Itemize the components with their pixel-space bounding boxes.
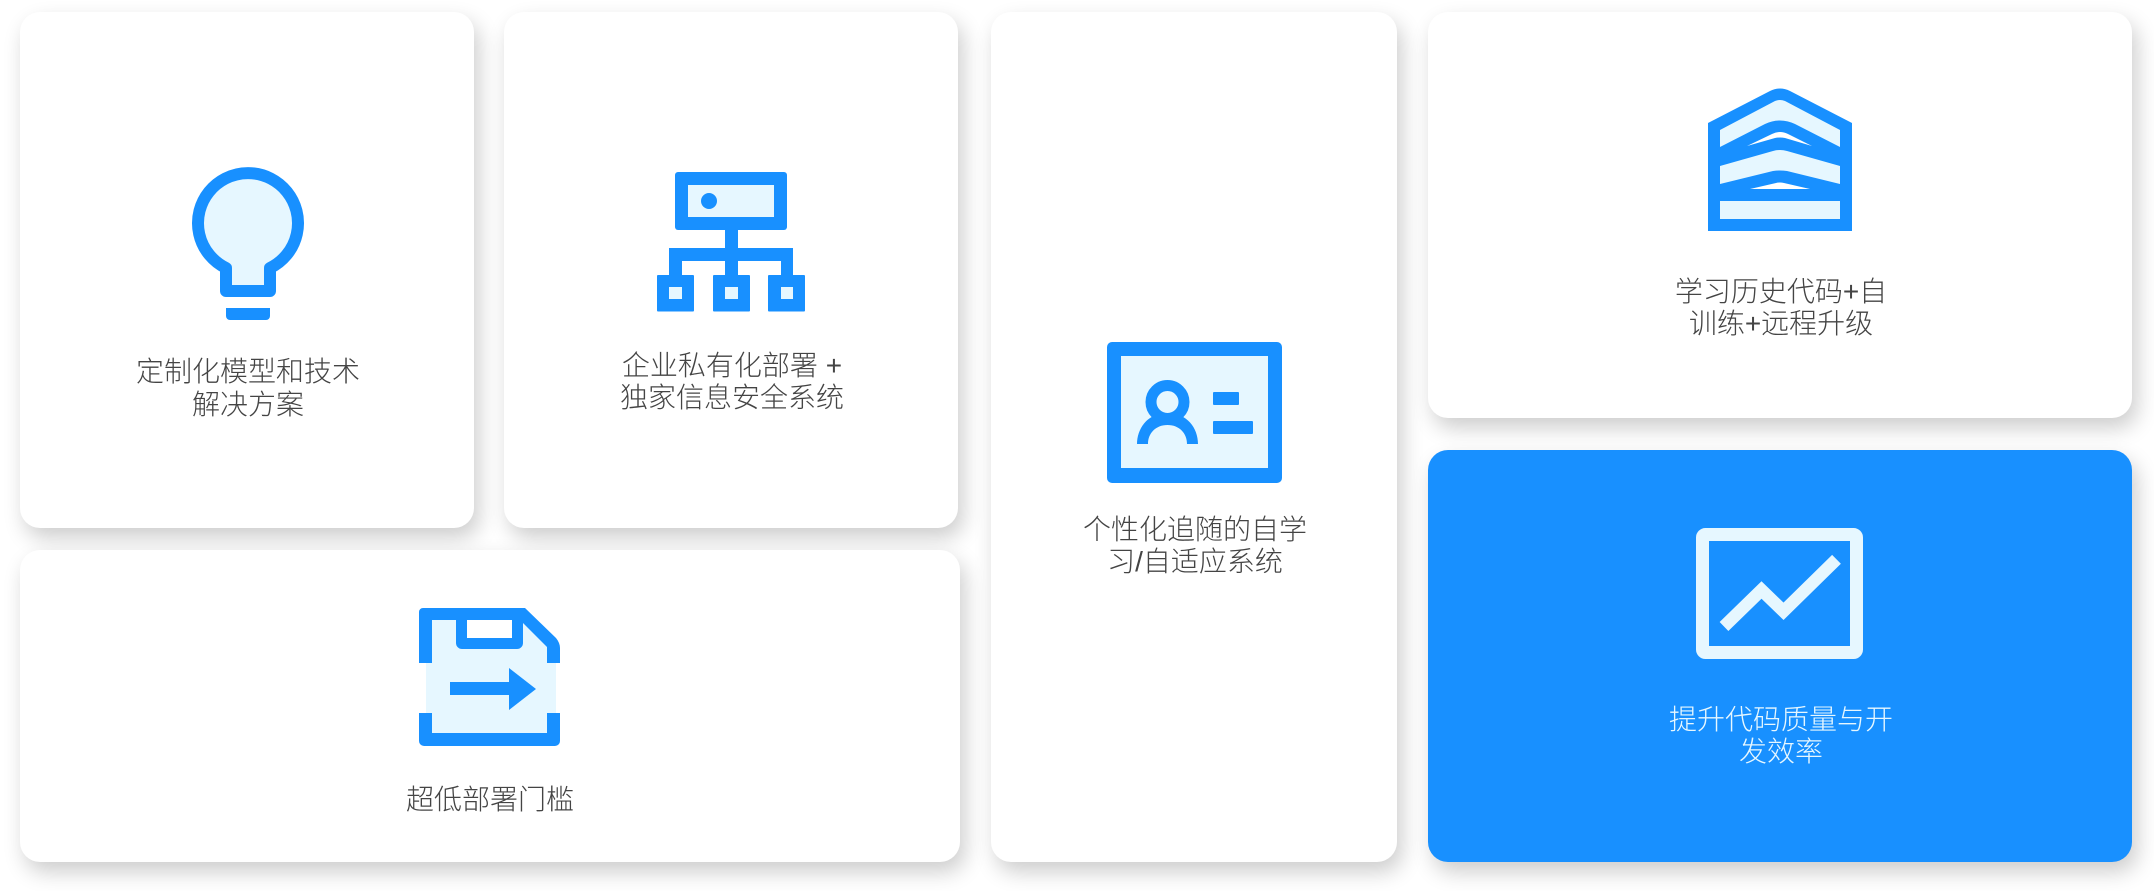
icon: floppy disk with arrow [419, 608, 560, 746]
panel: low deployment threshold [20, 550, 960, 862]
text: custom models label [136, 356, 360, 420]
text: learn from code history label: 学习历史代码+自 [1675, 276, 1887, 307]
text: improve quality label: 发效率 [1739, 736, 1823, 767]
panel: improve quality and efficiency [1428, 450, 2132, 862]
text: private deployment label [620, 350, 844, 413]
panel: personalized learning [991, 12, 1397, 862]
text: personalized learning label: 习/自适应系统 [1107, 546, 1283, 577]
text: learn from code history label [1675, 276, 1887, 339]
text: custom models label: 定制化模型和技术 [136, 356, 360, 387]
icon: server hierarchy [657, 172, 805, 312]
text: improve quality label: 提升代码质量与开 [1669, 704, 1893, 735]
text: learn from code history label: 训练+远程升级 [1689, 308, 1873, 339]
panel: learn from code history [1428, 12, 2132, 418]
text: improve quality label [1669, 704, 1893, 767]
panel: custom models [20, 12, 474, 528]
icon: layered house [1708, 88, 1852, 231]
text: private deployment label: 独家信息安全系统 [620, 382, 844, 413]
icon: light bulb [192, 167, 304, 320]
text: private deployment label: 企业私有化部署 + [622, 350, 842, 381]
text: custom models label: 解决方案 [192, 389, 304, 420]
icon: line chart [1696, 528, 1863, 659]
panel: private deployment [504, 12, 958, 528]
icon: profile card [1107, 342, 1282, 483]
text: low threshold label: 超低部署门槛 [406, 784, 574, 815]
text: personalized learning label: 个性化追随的自学 [1083, 514, 1307, 545]
text: personalized learning label [1083, 514, 1307, 577]
